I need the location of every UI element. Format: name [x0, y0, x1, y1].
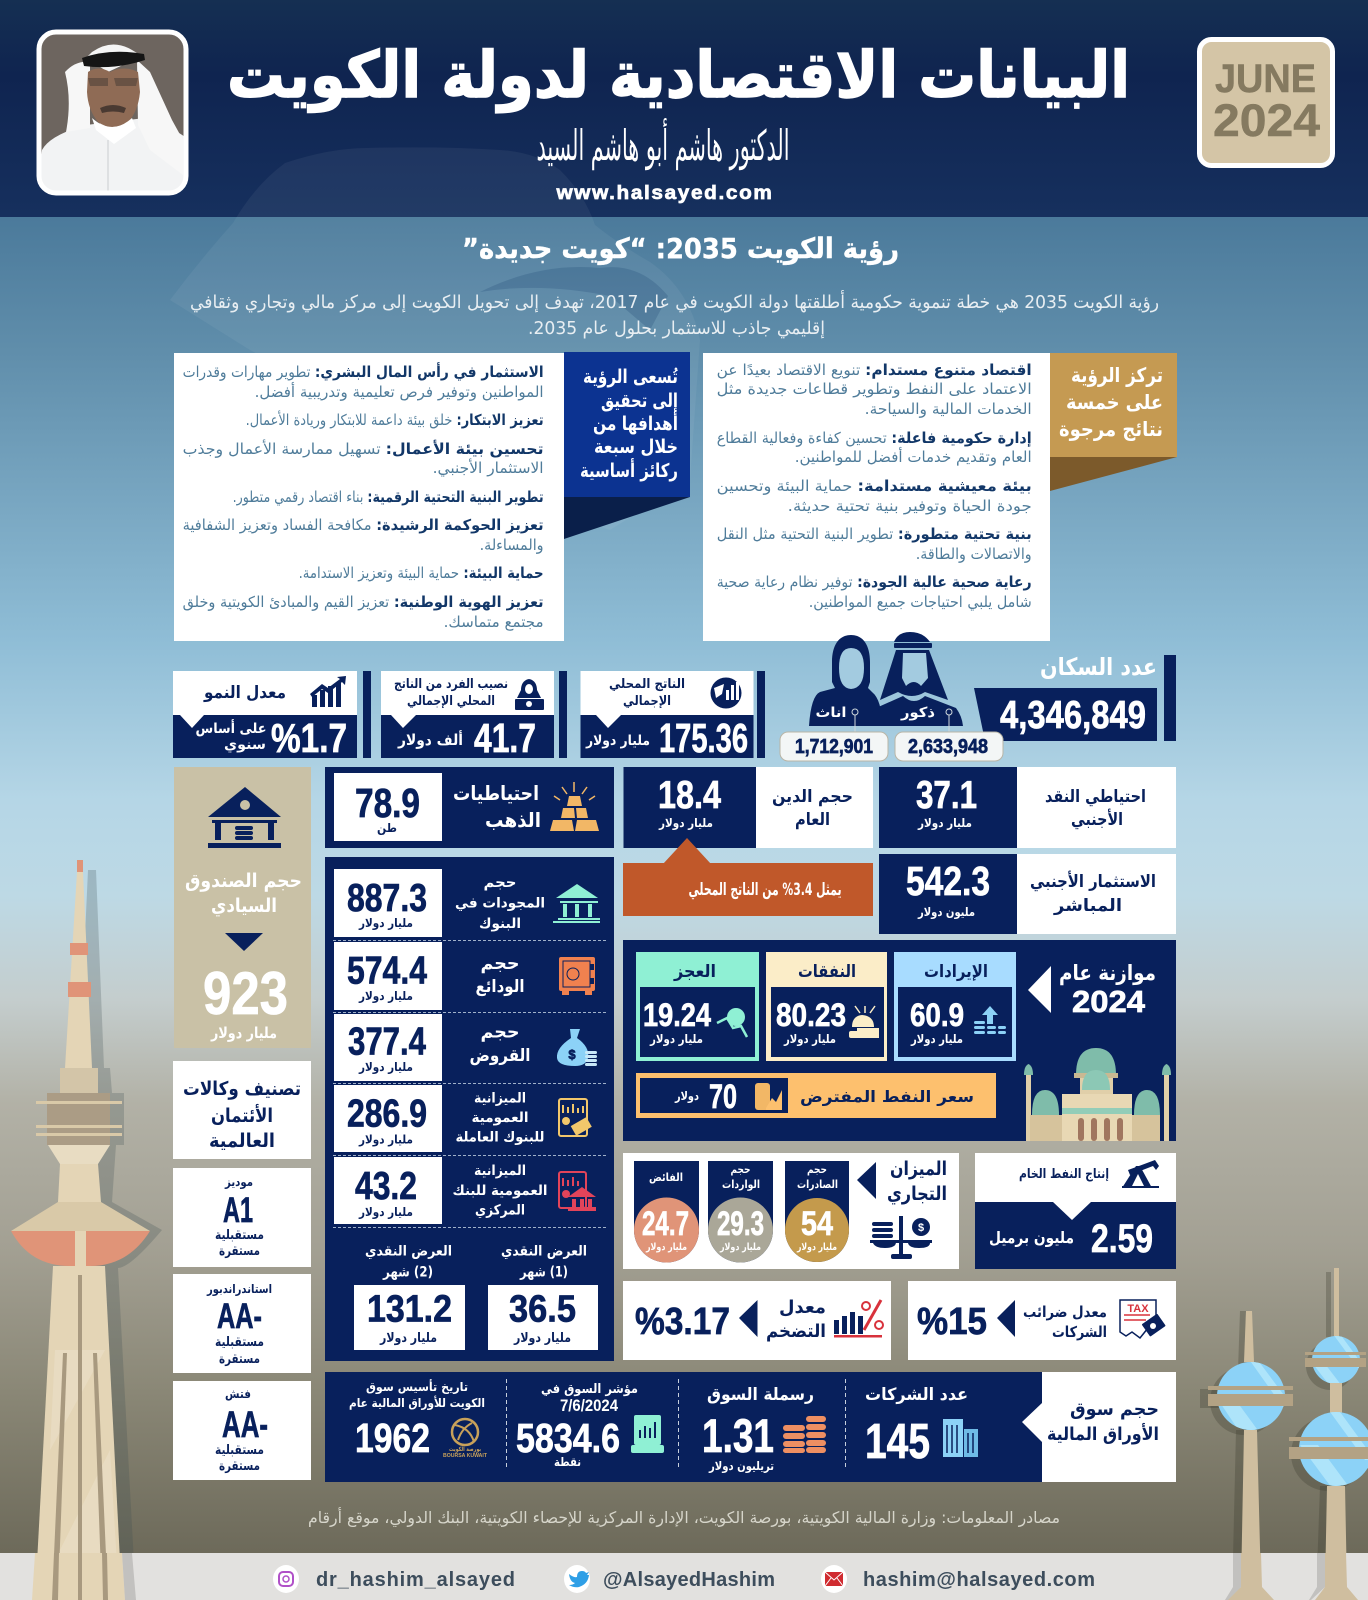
panel: sovereign fund: مليار دولار [210, 1024, 277, 1042]
card: Fitch rating: مستقبلية [215, 1443, 264, 1458]
social: instagram [273, 1565, 515, 1593]
panel: foreign direct investment: المباشر [1053, 896, 1122, 916]
stat: growth rate: سنوي [224, 737, 266, 754]
row: central bank balance sheet: 43.2 [355, 1165, 417, 1208]
panel: seven pillars text: الاستثمار في رأس المال البشري: تطوير مهارات وقدرات [183, 362, 544, 382]
panel: seven pillars text: مجتمع متماسك. [444, 613, 544, 631]
panel: foreign direct investment: مليون دولار [917, 905, 975, 920]
card: expenses: النفقات [798, 962, 856, 982]
stat: GDP per capita: 41.7 [474, 715, 536, 761]
stat: GDP per capita [381, 671, 567, 761]
panel: public debt: حجم الدين [772, 787, 853, 807]
panel: inflation: التضخم [766, 1321, 826, 1342]
row: bank assets: 887.3 [347, 877, 427, 920]
panel: seven pillars text: تطوير البنية التحتية الرقمية: بناء اقتصاد رقمي متطور. [233, 488, 544, 507]
row: banks balance sheet: العمومية [472, 1110, 528, 1126]
row: deposits: الودائع [476, 977, 524, 997]
social: instagram: dr_hashim_alsayed [316, 1569, 515, 1591]
intro paragraph [190, 290, 1159, 339]
card: S&P rating: AA- [217, 1297, 262, 1336]
panel: five outcomes ribbon: تركز الرؤية [1071, 363, 1163, 387]
panel: seven pillars text: الاستثمار الأجنبي. [433, 458, 544, 478]
panel: five outcomes text: والاتصالات والطاقة. [916, 545, 1032, 563]
panel: seven pillars text: المواطنين وتوفير فرص تعليمية وتدريبية أفضل. [255, 382, 544, 401]
card: expenses [766, 952, 887, 1061]
illustration: liberation tower [11, 860, 162, 1600]
panel: public debt: مليار دولار [658, 816, 713, 831]
data sources: مصادر المعلومات: وزارة المالية الكويتية، بورصة الكويت، الإدارة المركزية للإحصاء الكويتية، البنك الدولي، موقع أرقام [308, 1507, 1060, 1528]
panel: five outcomes text: جودة الحياة وتوفير بنية تحتية حديثة. [788, 497, 1032, 515]
card: revenue: مليار دولار [910, 1032, 963, 1047]
row: loans: $ [568, 1047, 576, 1062]
panel: five outcomes text: اقتصاد متنوع مستدام: تنويع الاقتصاد بعيدًا عن [717, 361, 1032, 379]
column: market founding: بورصة الكويت [449, 1446, 481, 1453]
card: Moody's rating: مستقبلية [215, 1228, 264, 1243]
panel: foreign reserves: احتياطي النقد [1045, 787, 1146, 807]
stat: population: عدد السكان [1040, 653, 1157, 681]
callout: debt share of GDP: يمثل 3.4% من الناتج المحلي [688, 880, 842, 900]
stat: GDP per capita: ألف دولار [397, 730, 463, 749]
column: market index: مؤشر السوق في [541, 1382, 638, 1397]
row: banks balance sheet: مليار دولار [358, 1132, 413, 1148]
column: market founding [349, 1379, 487, 1461]
stat: population: 2,633,948 [908, 736, 988, 758]
card: Moody's rating: A1 [223, 1191, 253, 1230]
icon: scale [870, 1216, 932, 1259]
row: deposits: مليار دولار [358, 989, 413, 1004]
column: number of companies: 145 [865, 1415, 930, 1469]
panel: seven pillars text: تحسين بيئة الأعمال: تسهيل ممارسة الأعمال وجذب [183, 439, 544, 458]
row: bank assets: المجودات في [455, 896, 545, 912]
card: S&P rating: مستقرة [219, 1352, 260, 1367]
panel: five outcomes text: العام وتقديم خدمات أفضل للمواطنين. [795, 447, 1032, 466]
stat: GDP: الناتج المحلي [609, 677, 685, 692]
panel: seven pillars text [174, 353, 564, 641]
panel: five outcomes ribbon: نتائج مرجوة [1059, 417, 1163, 441]
row: M1 money supply [488, 1244, 598, 1350]
row: loans: حجم [480, 1022, 520, 1042]
panel: corporate tax: الشركات [1052, 1323, 1107, 1341]
panel: seven pillars ribbon: تُسعى الرؤية [583, 366, 678, 388]
panel: credit rating title: العالمية [209, 1130, 275, 1152]
stat: GDP: 175.36 [659, 715, 748, 761]
panel: banking sector [325, 857, 614, 1361]
column: imports: حجم [730, 1163, 750, 1176]
panel: inflation: معدل [779, 1297, 826, 1318]
oil price bar: سعر النفط المفترض [800, 1087, 974, 1106]
row: M1 money supply: (1) شهر [519, 1264, 568, 1280]
row: M2 money supply: العرض النقدي [365, 1244, 452, 1260]
card: S&P rating [173, 1274, 311, 1373]
panel: seven pillars ribbon: ركائز أساسية [580, 458, 678, 482]
panel: seven pillars text: تعزيز الابتكار: خلق بيئة داعمة للابتكار وريادة الأعمال. [246, 410, 544, 429]
card: deficit: مليار دولار [649, 1032, 703, 1047]
card: Moody's rating [173, 1168, 311, 1267]
row: central bank balance sheet: مليار دولار [358, 1205, 413, 1220]
panel: foreign reserves: 37.1 [916, 774, 977, 817]
panel: foreign reserves: الأجنبي [1071, 809, 1123, 830]
icon: male figure [868, 632, 963, 726]
row: banks balance sheet: الميزانية [474, 1090, 526, 1106]
card: Moody's rating: مستقرة [219, 1244, 260, 1259]
icon: female figure [809, 635, 882, 726]
column: market founding: BOURSA KUWAIT [443, 1453, 487, 1459]
stat: population [780, 632, 1176, 761]
column: number of companies: عدد الشركات [865, 1385, 968, 1405]
card: Moody's rating: موديز [224, 1175, 253, 1190]
column: market index: نقطة [554, 1455, 581, 1469]
row: bank assets [334, 869, 600, 937]
icon: gold bars [550, 782, 599, 831]
panel: five outcomes text [703, 353, 1050, 641]
panel: corporate tax: %15 [917, 1301, 987, 1343]
column: imports: الواردات [722, 1178, 760, 1191]
social: twitter: @AlsayedHashim [603, 1569, 775, 1591]
panel: trade balance: الميزان [890, 1158, 947, 1180]
panel: crude oil production [975, 1153, 1176, 1269]
panel: stock market [325, 1372, 1176, 1482]
row: bank assets: مليار دولار [358, 916, 413, 931]
panel: gold reserves: 78.9 [355, 780, 420, 826]
row: M2 money supply: (2) شهر [382, 1264, 433, 1280]
social: twitter [564, 1565, 775, 1593]
column: market founding: تاريخ تأسيس سوق [366, 1379, 468, 1395]
row: banks balance sheet: للبنوك العاملة [456, 1130, 544, 1146]
column: exports: حجم [807, 1163, 827, 1176]
column: market cap: 1.31 [702, 1409, 774, 1462]
stat: GDP per capita: نصيب الفرد من الناتج [394, 677, 508, 692]
intro paragraph: رؤية الكويت 2035 هي خطة تنموية حكومية أطلقتها دولة الكويت في عام 2017، تهدف إلى تحويل الكويت إلى مركز مالي وتجاري وثقافي [190, 290, 1159, 313]
icon: inflation chart [834, 1300, 883, 1338]
card: expenses: مليار دولار [783, 1032, 836, 1047]
column: exports [785, 1161, 849, 1262]
panel: corporate tax: معدل ضرائب [1023, 1303, 1107, 1321]
date badge: 2024 [1213, 95, 1320, 146]
panel: budget 2024 [623, 940, 1176, 1141]
main title: البيانات الاقتصادية لدولة الكويت [227, 39, 1130, 113]
panel: seven pillars text: تعزيز الهوية الوطنية: تعزيز القيم والمبادئ الكويتية وخلق [183, 593, 544, 611]
card: S&P rating: مستقبلية [215, 1335, 264, 1350]
oil price bar: دولار [674, 1089, 699, 1104]
panel: public debt: العام [795, 810, 830, 830]
panel: five outcomes text: رعاية صحية عالية الجودة: توفير نظام رعاية صحية [717, 573, 1032, 591]
card: Fitch rating: فتش [225, 1387, 251, 1401]
column: market index [516, 1382, 664, 1469]
panel: five outcomes text: الاعتماد على النفط وتطوير قطاعات جديدة مثل [717, 380, 1032, 398]
row: central bank balance sheet [334, 1157, 596, 1224]
card: Fitch rating: مستقرة [219, 1459, 260, 1474]
footer bar [0, 1553, 1368, 1600]
panel: gold reserves: احتياطيات [453, 781, 539, 805]
stat: GDP: مليار دولار [585, 733, 650, 749]
stat: growth rate: معدل النمو [203, 683, 286, 703]
panel: seven pillars ribbon: أهدافها من [593, 411, 678, 435]
panel: five outcomes text: بيئة معيشية مستدامة: حماية البيئة وتحسين [717, 477, 1032, 495]
row: bank assets: حجم [484, 875, 516, 891]
panel: public debt [624, 767, 873, 848]
column: market founding: الكويت للأوراق المالية عام [349, 1395, 485, 1411]
text: الدكتور هاشم أبو هاشم السيد [536, 118, 790, 171]
panel: seven pillars text: والمساءلة. [480, 536, 544, 554]
column: market index: 5834.6 [516, 1415, 620, 1461]
social: email: hashim@halsayed.com [863, 1569, 1095, 1591]
panel: five outcomes text: الخدمات المالية والسياحة. [865, 400, 1032, 418]
panel: budget 2024: موازنة عام [1059, 961, 1156, 985]
intro paragraph: إقليمي جاذب للاستثمار بحلول عام 2035. [528, 318, 825, 339]
panel: credit rating title: الأئتمان [211, 1104, 273, 1127]
panel: seven pillars ribbon: إلى تحقيق [601, 390, 678, 412]
column: market cap [702, 1385, 826, 1474]
panel: crude oil production: إنتاج النفط الخام [1019, 1167, 1109, 1182]
card: deficit [636, 952, 759, 1061]
panel: inflation [623, 1281, 891, 1360]
card: Fitch rating: AA- [222, 1404, 268, 1445]
panel: foreign direct investment: 542.3 [906, 858, 990, 904]
row: loans [334, 1014, 597, 1081]
column: number of companies [865, 1385, 978, 1469]
icon: scale: $ [918, 1222, 924, 1234]
row: deposits: 574.4 [347, 950, 427, 992]
callout: debt share of GDP [623, 838, 873, 916]
panel: sovereign fund: 923 [203, 960, 288, 1027]
icon: growth chart [310, 676, 346, 707]
stat: population: 4,346,849 [1000, 694, 1146, 737]
column: surplus: الفائض [649, 1171, 683, 1184]
website: www.halsayed.com [555, 183, 774, 204]
row: M1 money supply: العرض النقدي [501, 1244, 587, 1260]
stat: growth rate [173, 671, 371, 761]
panel: five outcomes text: بنية تحتية متطورة: تطوير البنية التحتية مثل النقل [717, 525, 1032, 543]
row: loans: 377.4 [348, 1020, 426, 1064]
panel: five outcomes text: شامل يلبي احتياجات جميع المواطنين. [809, 593, 1032, 612]
panel: crude oil production: مليون برميل [989, 1228, 1074, 1247]
panel: seven pillars text: حماية البيئة: حماية البيئة وتعزيز الاستدامة. [299, 564, 544, 582]
row: central bank balance sheet: المركزي [475, 1202, 525, 1220]
icon: tax bill [1120, 1300, 1166, 1338]
panel: foreign direct investment [879, 854, 1176, 934]
panel: foreign reserves: مليار دولار [917, 816, 972, 831]
card: revenue [894, 952, 1016, 1061]
panel: seven pillars ribbon: خلال سبعة [594, 436, 678, 458]
card: Fitch rating [173, 1381, 311, 1480]
card: deficit: 19.24 [643, 997, 711, 1033]
row: banks balance sheet: 286.9 [347, 1092, 427, 1136]
row: M2 money supply: مليار دولار [379, 1331, 437, 1346]
column: market cap: رسملة السوق [707, 1385, 814, 1405]
column: imports: مليار دولار [719, 1242, 761, 1253]
illustration: grand mosque [1024, 1048, 1171, 1141]
illustration: kuwait towers [1200, 1268, 1368, 1553]
column: market founding: 1962 [355, 1415, 430, 1461]
column: market cap: تريليون دولار [708, 1459, 774, 1474]
row: loans: القروض [470, 1046, 530, 1066]
icon: globe with bars [710, 678, 742, 708]
stat: growth rate: %1.7 [271, 715, 347, 761]
column: imports [708, 1161, 773, 1262]
column: exports: 54 [801, 1205, 833, 1243]
panel: corporate tax [908, 1281, 1176, 1360]
card: deficit: العجز [673, 962, 716, 982]
icon: person with money [515, 679, 544, 710]
oil price bar: 70 [709, 1078, 737, 1116]
panel: inflation: %3.17 [635, 1301, 730, 1343]
stat: growth rate: على أساس [196, 719, 266, 737]
stat: GDP per capita: المحلي الإجمالي [407, 694, 495, 709]
social: email [821, 1565, 1095, 1593]
panel: credit rating title [173, 1061, 311, 1159]
panel: five outcomes ribbon [1050, 353, 1177, 491]
column: surplus [634, 1161, 699, 1262]
panel: sovereign fund: السيادي [211, 895, 277, 918]
panel: public debt: 18.4 [658, 774, 721, 817]
panel: five outcomes text: إدارة حكومية فاعلة: تحسين كفاءة وفعالية القطاع [717, 429, 1032, 447]
row: loans: مليار دولار [358, 1060, 413, 1075]
panel: foreign reserves [879, 767, 1176, 848]
panel: foreign direct investment: الاستثمار الأجنبي [1030, 871, 1156, 892]
panel: crude oil production: 2.59 [1091, 1217, 1153, 1261]
panel: seven pillars ribbon [564, 352, 690, 539]
panel: sovereign fund [174, 767, 311, 1048]
stat: GDP: الإجمالي [623, 694, 671, 709]
panel: budget 2024: 2024 [1072, 984, 1146, 1019]
stat: population: 1,712,901 [795, 736, 873, 758]
icon: tax bill: TAX [1127, 1303, 1149, 1315]
panel: credit rating title: تصنيف وكالات [183, 1078, 301, 1100]
date badge [1200, 40, 1332, 166]
panel: stock market: الأوراق المالية [1047, 1423, 1159, 1445]
row: central bank balance sheet: العمومية للبنك [452, 1183, 548, 1199]
card: revenue: الإيرادات [924, 962, 988, 982]
stat: GDP [580, 671, 765, 761]
row: central bank balance sheet: الميزانية [474, 1163, 526, 1179]
panel: five outcomes ribbon: على خمسة [1066, 390, 1163, 414]
column: market index: 7/6/2024 [560, 1396, 618, 1415]
column: surplus: مليار دولار [645, 1242, 687, 1253]
row: deposits [334, 942, 595, 1010]
card: S&P rating: استاندراندبور [206, 1282, 272, 1297]
stat: population: ذكور [900, 705, 935, 721]
row: M1 money supply: مليار دولار [513, 1331, 571, 1346]
card: revenue: 60.9 [910, 997, 964, 1033]
row: M2 money supply: 131.2 [367, 1288, 452, 1330]
panel: gold reserves [325, 767, 614, 848]
row: M1 money supply: 36.5 [509, 1288, 576, 1330]
row: M2 money supply [354, 1244, 465, 1350]
column: exports: الصادرات [797, 1178, 838, 1191]
row: banks balance sheet [334, 1085, 592, 1152]
row: deposits: حجم [480, 954, 520, 974]
date badge: JUNE [1215, 57, 1316, 101]
panel: sovereign fund: حجم الصندوق [185, 870, 302, 892]
header portrait [36, 32, 189, 200]
panel: gold reserves: طن [377, 821, 397, 835]
oil price bar [636, 1073, 996, 1118]
card: expenses: 80.23 [776, 997, 846, 1033]
panel: trade balance [623, 1153, 959, 1269]
icon: oil pump [1122, 1160, 1159, 1188]
row: bank assets: البنوك [479, 916, 521, 932]
panel: gold reserves: الذهب [485, 808, 541, 832]
panel: trade balance: التجاري [887, 1183, 947, 1206]
stat: population: اناث [816, 705, 846, 721]
panel: stock market: حجم سوق [1070, 1399, 1159, 1420]
column: exports: مليار دولار [796, 1242, 837, 1253]
section heading: رؤية الكويت 2035: “كويت جديدة” [462, 232, 899, 265]
icon: bank building [208, 787, 281, 848]
panel: seven pillars text: تعزيز الحوكمة الرشيدة: مكافحة الفساد وتعزيز الشفافية [183, 516, 544, 534]
column: imports: 29.3 [717, 1205, 764, 1243]
column: surplus: 24.7 [642, 1205, 689, 1243]
